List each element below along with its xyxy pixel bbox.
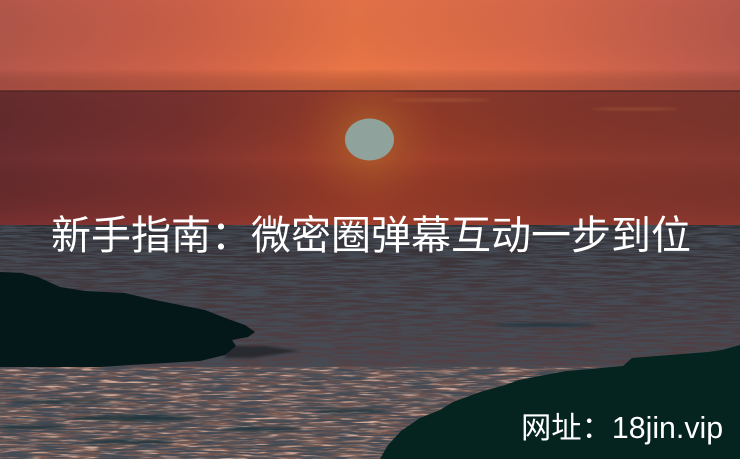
sun glow: [294, 68, 444, 212]
sea water: [0, 225, 740, 459]
right island silhouette: [380, 345, 740, 459]
island reflection shadow: [225, 346, 300, 358]
sun: [345, 118, 394, 160]
title: 新手指南：微密圈弹幕互动一步到位: [51, 214, 691, 258]
left island silhouette: [0, 272, 255, 367]
red sun-lit band: [0, 90, 740, 226]
thin clouds: [390, 98, 679, 110]
sky: [0, 0, 740, 92]
website address: 网址：18jin.vip: [521, 412, 723, 445]
